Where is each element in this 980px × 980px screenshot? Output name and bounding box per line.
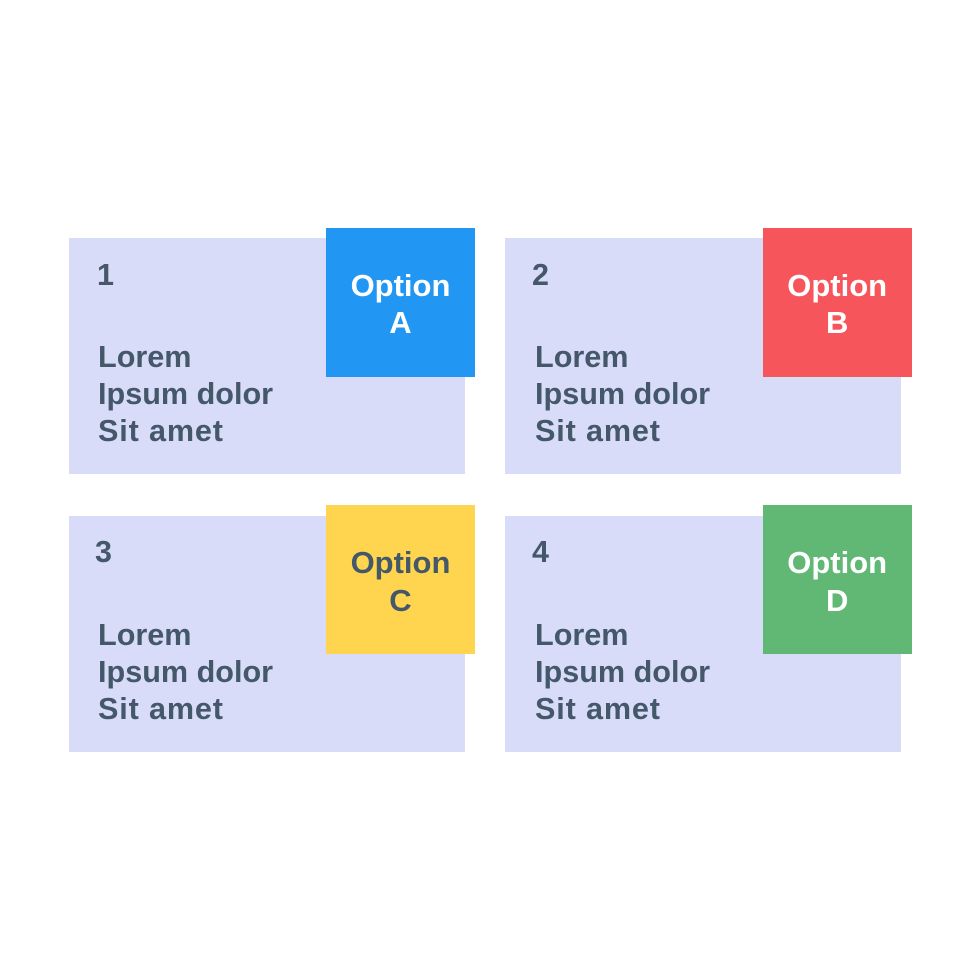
option tile C: C <box>389 583 412 618</box>
text block 4: Ipsum dolor <box>535 655 710 689</box>
text block 4 <box>535 618 710 726</box>
option tile A: A <box>389 305 412 340</box>
number 1: 1 <box>97 258 114 292</box>
text block 2 <box>535 340 710 448</box>
option tile C <box>326 505 475 654</box>
option tile B <box>763 228 912 377</box>
option tile A: Option <box>351 268 450 303</box>
text block 1 <box>98 340 273 448</box>
text block 4: Sit amet <box>535 692 661 726</box>
text block 4: Lorem <box>535 618 628 652</box>
text block 3: Sit amet <box>98 692 224 726</box>
option tile B: B <box>826 305 848 340</box>
panel: card 1 <box>69 238 464 474</box>
option tile A <box>326 228 475 377</box>
number 2: 2 <box>532 258 549 292</box>
panel: card 3 <box>69 516 464 752</box>
text block 2: Ipsum dolor <box>535 377 710 411</box>
number 4: 4 <box>532 535 549 569</box>
option tile D: Option <box>787 545 887 580</box>
text block 3: Lorem <box>98 618 192 652</box>
panel: card 4 <box>505 516 900 752</box>
number 3: 3 <box>95 535 112 569</box>
option tile B: Option <box>787 268 887 303</box>
text block 2: Lorem <box>535 340 628 374</box>
text block 2: Sit amet <box>535 414 661 448</box>
text block 3 <box>98 618 273 726</box>
text block 3: Ipsum dolor <box>98 655 273 689</box>
option tile D <box>763 505 912 654</box>
text block 1: Lorem <box>98 340 192 374</box>
option tile C: Option <box>351 545 450 580</box>
text block 1: Sit amet <box>98 414 224 448</box>
option tile D: D <box>826 583 848 618</box>
text block 1: Ipsum dolor <box>98 377 273 411</box>
panel: card 2 <box>505 238 900 474</box>
